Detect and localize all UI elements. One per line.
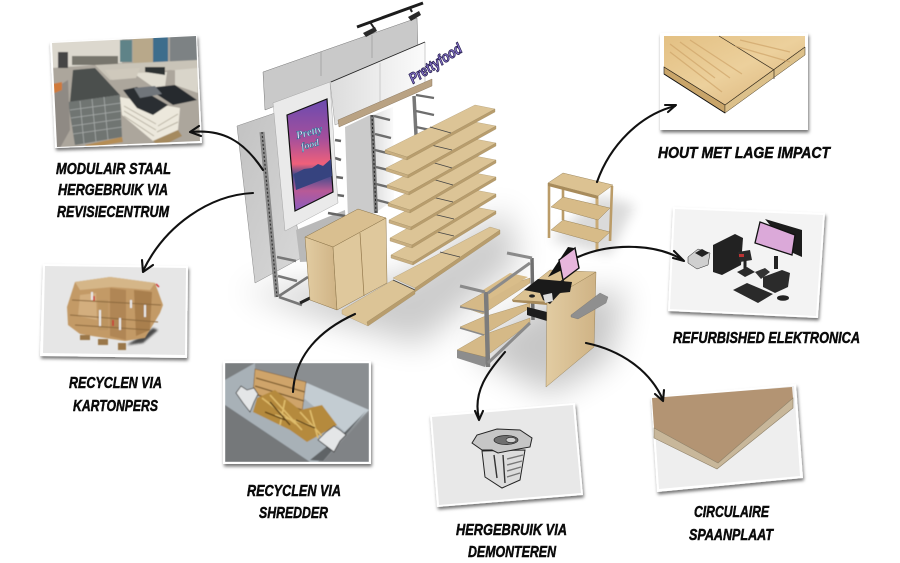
left side panel (237, 113, 303, 283)
neon sign: Prettyfood (406, 40, 466, 87)
photo: cardboard bale (40, 264, 188, 358)
side shelf (571, 293, 608, 319)
caption: kartonpers: KARTONPERS (73, 398, 158, 415)
track light (357, 3, 423, 37)
caption: demonteren (456, 522, 567, 561)
arrow: demounting (475, 352, 505, 420)
back acoustic panel (263, 18, 418, 110)
caption: kartonpers (69, 375, 162, 415)
arrows (142, 105, 684, 420)
floor shadows (240, 195, 635, 395)
upper light panel (330, 42, 425, 125)
caption: modulair staal: HERGEBRUIK VIA (58, 182, 168, 199)
caption: shredder: SHREDDER (259, 505, 328, 522)
digital screen: Pretty (295, 123, 324, 142)
arrow: shredder (293, 314, 355, 392)
caption: demonteren: HERGEBRUIK VIA (456, 522, 567, 539)
caption: shredder: RECYCLEN VIA (247, 483, 341, 500)
checkout desk (512, 247, 608, 387)
photo: refurbished electronics (668, 207, 825, 318)
caption: shredder (247, 483, 341, 522)
inner grey panels (296, 107, 394, 262)
caption: modulair staal (56, 161, 171, 221)
arrow: electronics (578, 247, 684, 261)
metal gondola shelf (457, 253, 533, 367)
caption: hout: HOUT MET LAGE IMPACT (658, 145, 831, 162)
arrow: wood (597, 105, 676, 182)
wooden cabinet (305, 209, 387, 310)
arrow: chipboard (586, 343, 664, 401)
caption: demonteren: DEMONTEREN (468, 544, 556, 561)
caption: spaanplaat: SPAANPLAAT (689, 527, 774, 544)
metal uprights and arms (262, 95, 434, 305)
caption: modulair staal: REVISIECENTRUM (57, 204, 170, 221)
caption: spaanplaat: CIRCULAIRE (694, 504, 770, 521)
monitors and pos (524, 247, 579, 304)
front white panel (273, 82, 338, 231)
tall shelving tiers (342, 105, 500, 326)
photo: wood (660, 33, 808, 130)
photo: cam connector (430, 403, 583, 507)
digital screen: food (300, 137, 321, 153)
caption: spaanplaat (689, 504, 774, 544)
sign beam (338, 79, 432, 127)
main display wall unit (237, 3, 500, 326)
arrow: cardboard (142, 193, 253, 272)
arrow: steel (190, 126, 263, 170)
caption: modulair staal: MODULAIR STAAL (56, 161, 171, 178)
caption: kartonpers: RECYCLEN VIA (69, 375, 162, 392)
photo: chipboard (651, 384, 803, 492)
photo: shredder (223, 361, 371, 464)
photo: steel warehouse (50, 34, 202, 149)
small wooden shelf unit (548, 173, 613, 250)
digital screen (287, 99, 333, 211)
